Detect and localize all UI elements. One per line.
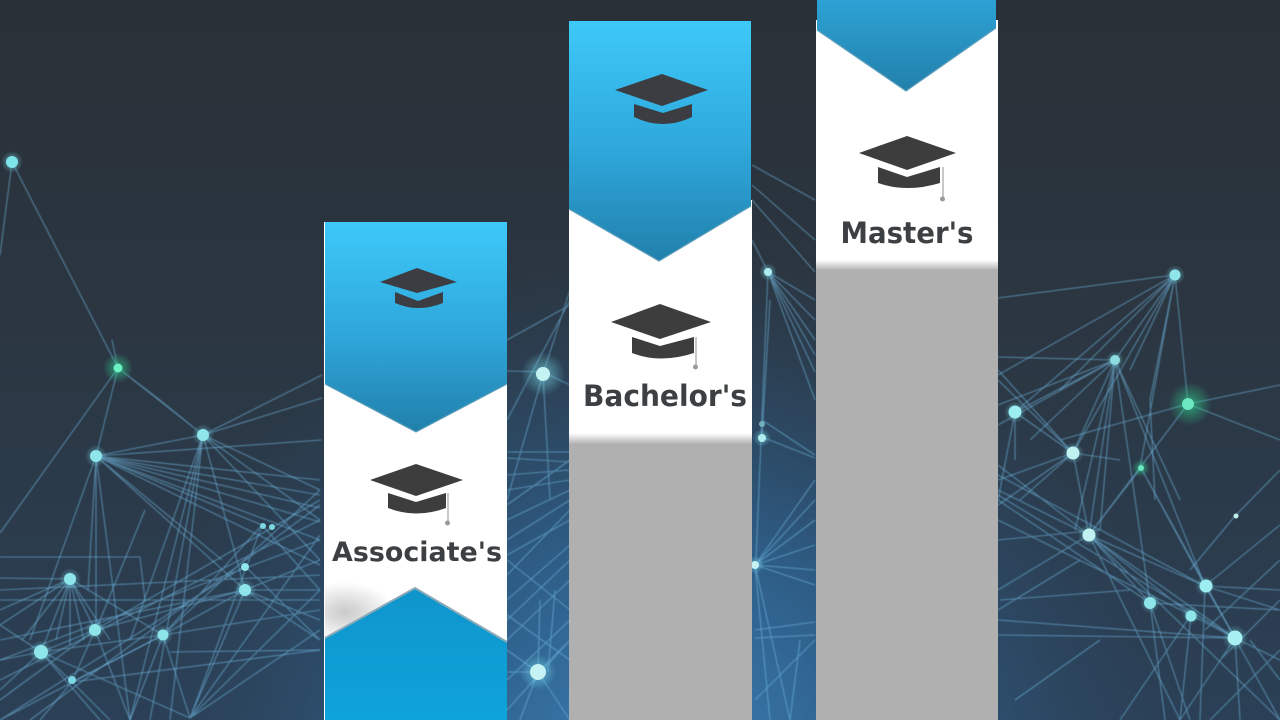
icon: small graduation cap on ribbon	[380, 268, 457, 308]
blue ribbon with chevron	[325, 222, 507, 432]
label: Associate's	[332, 537, 502, 568]
ribbon edge	[325, 588, 507, 642]
soft shadow above lower ribbon	[325, 586, 384, 635]
icon: graduation cap	[370, 464, 463, 526]
icon: graduation cap	[859, 136, 956, 202]
grey top shading	[816, 260, 998, 271]
grey column body	[816, 267, 998, 720]
grey top shading	[569, 433, 752, 445]
label: Bachelor's	[583, 379, 747, 413]
network: left	[0, 162, 322, 720]
white label panel	[816, 20, 998, 263]
network: centre gaps	[507, 165, 815, 720]
icon: small graduation cap on ribbon	[615, 74, 708, 124]
blue ribbon with chevron	[569, 21, 751, 261]
blue ribbon with chevron	[817, 0, 996, 91]
network nodes	[1, 151, 1248, 690]
network: right	[998, 275, 1280, 720]
lower blue ribbon	[325, 588, 507, 720]
label: Master's	[840, 216, 974, 250]
column: Master's	[816, 0, 998, 720]
white label panel	[569, 200, 752, 436]
grey column body	[569, 440, 752, 720]
icon: graduation cap	[611, 304, 711, 370]
column: Associate's	[324, 222, 508, 720]
column: Bachelor's	[569, 21, 752, 720]
column body	[324, 222, 507, 720]
